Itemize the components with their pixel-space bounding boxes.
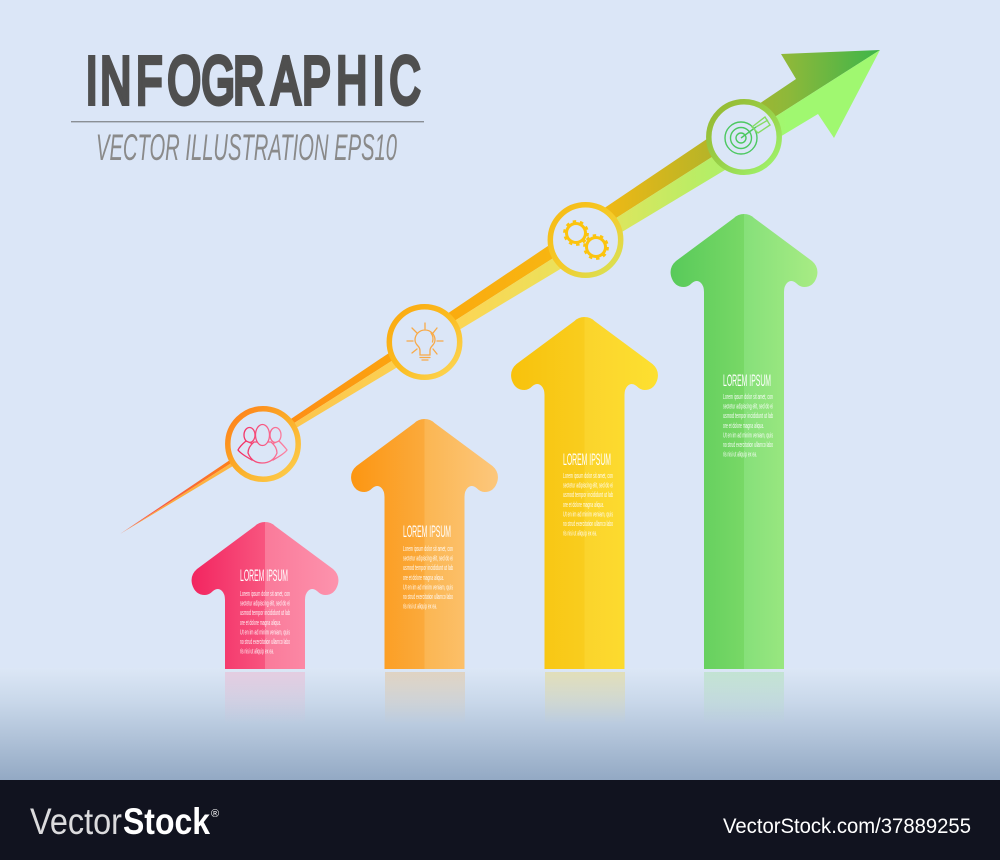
step 2 circle: idea xyxy=(389,307,460,377)
body text: ris nisi ut aliquip ex ea. xyxy=(723,450,757,459)
body text: ore et dolore magna aliqua. xyxy=(403,573,444,582)
column 2: orange arrow: Ut en im ad minim veniam, quis xyxy=(403,582,453,591)
column 2: orange arrow: Lorem ipsum dolor sit amet, con xyxy=(403,544,453,553)
column 1: pink arrow: sectetur adipiscing elit, sed do ei xyxy=(240,599,290,608)
column 1: pink arrow: Lorem ipsum dolor sit amet, con xyxy=(240,589,290,598)
icon: target xyxy=(725,117,770,154)
column 3: yellow arrow: Lorem ipsum dolor sit amet, con xyxy=(563,471,613,480)
body text xyxy=(240,589,290,656)
body text: ore et dolore magna aliqua. xyxy=(240,618,281,627)
body text xyxy=(403,544,453,611)
column 4: green arrow: usmod tempor incididunt ut lab xyxy=(723,411,773,420)
body text: ris nisi ut aliquip ex ea. xyxy=(563,529,597,538)
column 3: yellow arrow xyxy=(511,317,658,669)
footer logo: Stock xyxy=(123,801,210,842)
column 2: orange arrow: usmod tempor incididunt ut lab xyxy=(403,563,453,572)
arrow dark upper half xyxy=(120,50,880,534)
footer bar xyxy=(0,780,1000,860)
step 4 circle: goal xyxy=(709,102,779,172)
floor reflections xyxy=(225,672,784,724)
floor gradient xyxy=(0,668,1000,780)
step 3 circle: process xyxy=(550,205,621,275)
column 2: orange arrow: no strud exercitation ullamco labo xyxy=(403,592,453,601)
body text: ris nisi ut aliquip ex ea. xyxy=(240,647,274,656)
column 1: pink arrow: Ut en im ad minim veniam, quis xyxy=(240,627,290,636)
rising trend arrow xyxy=(120,50,880,534)
column 3: yellow arrow: LOREM IPSUM xyxy=(563,451,611,469)
body text: ore et dolore magna aliqua. xyxy=(723,421,764,430)
title rule xyxy=(71,121,424,122)
body text xyxy=(563,471,613,538)
column 3: yellow arrow: no strud exercitation ullamco labo xyxy=(563,519,613,528)
body text xyxy=(723,392,773,459)
footer image id: VectorStock.com/37889255 xyxy=(723,815,971,838)
column 4: green arrow: Ut en im ad minim veniam, quis xyxy=(723,430,773,439)
column 4: green arrow: sectetur adipiscing elit, sed do ei xyxy=(723,402,773,411)
step 1 circle: people xyxy=(228,409,298,479)
title: INFOGRAPHIC xyxy=(86,43,420,118)
icon: people xyxy=(238,424,287,463)
column 1: pink arrow: no strud exercitation ullamco labo xyxy=(240,637,290,646)
column 4: green arrow: LOREM IPSUM xyxy=(723,372,771,390)
column 2: orange arrow: LOREM IPSUM xyxy=(403,523,451,541)
icon: light bulb xyxy=(407,323,443,360)
column 2: orange arrow: sectetur adipiscing elit, sed do ei xyxy=(403,554,453,563)
column 4: green arrow xyxy=(671,214,817,669)
column 4: green arrow: no strud exercitation ullamco labo xyxy=(723,440,773,449)
column 1: pink arrow: usmod tempor incididunt ut lab xyxy=(240,608,290,617)
icon: gears xyxy=(564,222,608,258)
column 2: orange arrow xyxy=(351,419,498,669)
arrow light lower half xyxy=(120,50,880,534)
column 3: yellow arrow: Ut en im ad minim veniam, quis xyxy=(563,509,613,518)
footer logo: Vector xyxy=(30,801,122,842)
body text: ris nisi ut aliquip ex ea. xyxy=(403,602,437,611)
column 3: yellow arrow: sectetur adipiscing elit, sed do ei xyxy=(563,481,613,490)
body text: ore et dolore magna aliqua. xyxy=(563,500,604,509)
footer logo: ® xyxy=(211,808,219,820)
column 4: green arrow: Lorem ipsum dolor sit amet, con xyxy=(723,392,773,401)
column 1: pink arrow: LOREM IPSUM xyxy=(240,567,288,585)
column 1: pink arrow xyxy=(192,522,338,669)
subtitle: VECTOR ILLUSTRATION EPS10 xyxy=(96,127,397,168)
footer logo xyxy=(30,801,219,842)
column 3: yellow arrow: usmod tempor incididunt ut lab xyxy=(563,490,613,499)
